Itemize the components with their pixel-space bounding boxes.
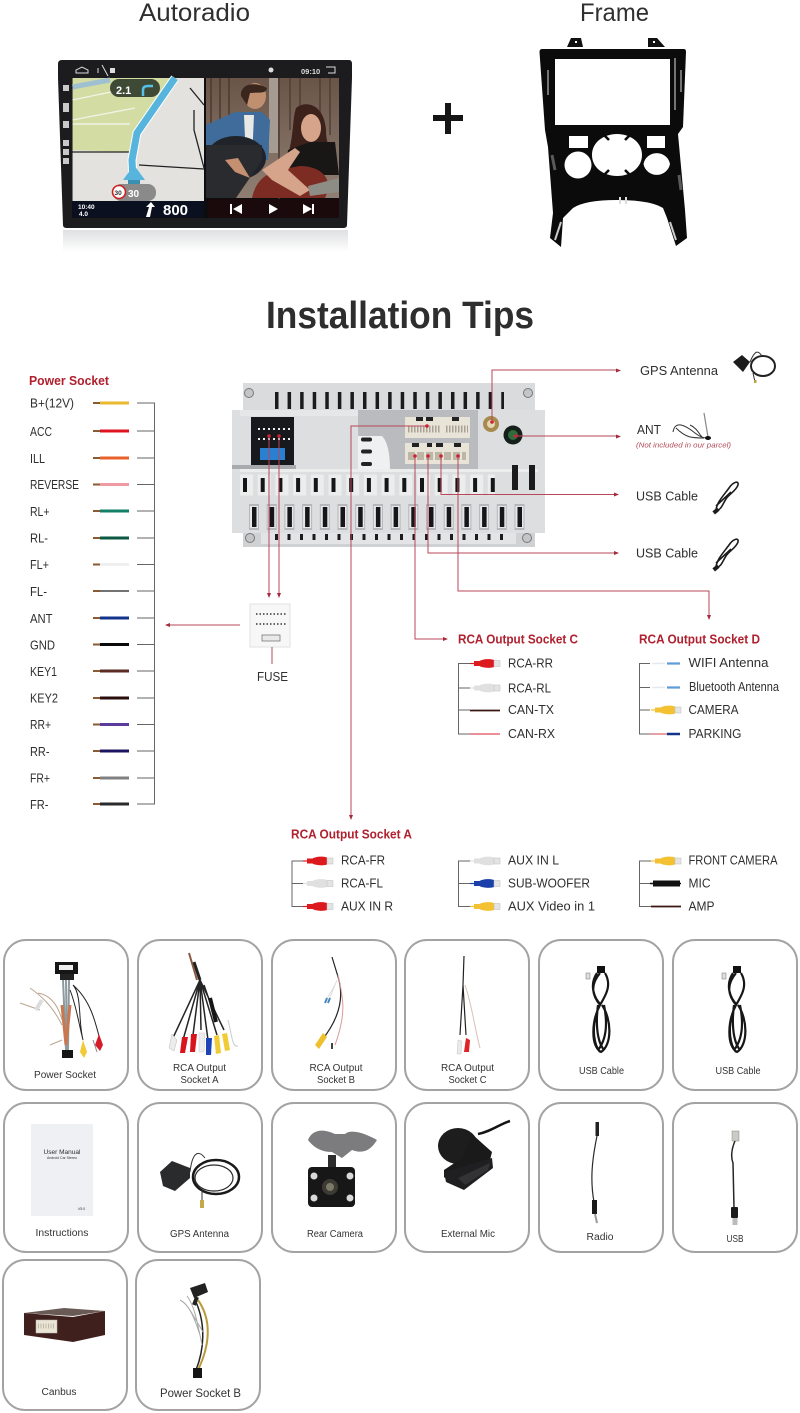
bracket right xyxy=(640,861,651,906)
wire: B+(12V): B+(12V) xyxy=(30,396,74,410)
row: FRONT CAMERA xyxy=(651,852,778,868)
manual booklet xyxy=(31,1124,93,1216)
wire: FL+ xyxy=(30,557,129,572)
USB ports xyxy=(358,436,390,470)
wire: GND: GND xyxy=(30,638,55,652)
row: MIC: MIC xyxy=(688,876,710,890)
card: Power Socket B xyxy=(136,1260,260,1410)
row: Bluetooth Antenna xyxy=(652,679,780,694)
row: PARKING xyxy=(650,726,742,741)
status bar xyxy=(76,65,335,76)
card: USB xyxy=(673,1103,797,1252)
wire: FL+: FL+ xyxy=(30,557,49,572)
wire: KEY2 xyxy=(30,690,129,706)
wire: FR+ xyxy=(30,770,129,786)
plus sign xyxy=(433,103,463,134)
bottom control bars: 10:40 xyxy=(78,204,95,211)
bracket xyxy=(640,664,650,734)
ANT connector xyxy=(504,426,522,444)
RCA Output Socket A xyxy=(291,828,778,914)
power socket wiring list xyxy=(29,374,154,812)
wire: ANT: ANT xyxy=(30,611,53,626)
wire: ILL: ILL xyxy=(30,451,45,466)
row: AUX IN L xyxy=(470,852,559,868)
row: AMP: AMP xyxy=(688,898,714,914)
wire: ACC: ACC xyxy=(30,424,52,439)
row: WIFI Antenna xyxy=(652,655,769,670)
row: AMP xyxy=(651,898,714,914)
row: AUX IN R: AUX IN R xyxy=(341,898,393,914)
bracket left xyxy=(292,861,303,906)
heading: RCA Output Socket C xyxy=(458,632,578,646)
card: Rear Camera xyxy=(272,1103,396,1252)
wire: FL-: FL- xyxy=(30,584,47,599)
wire: FR-: FR- xyxy=(30,797,48,812)
map area: 2.1 xyxy=(116,85,131,97)
card: Canbus xyxy=(3,1260,127,1410)
wire: KEY1: KEY1 xyxy=(30,664,57,679)
label: FUSE: FUSE xyxy=(257,669,288,684)
manual booklet: V5.0 xyxy=(78,1207,85,1211)
wire: GND xyxy=(30,638,129,652)
row: CAMERA xyxy=(651,702,739,717)
row: AUX Video in 1: AUX Video in 1 xyxy=(508,898,595,914)
label: Socket C xyxy=(448,1075,486,1086)
label: Power Socket xyxy=(34,1070,96,1081)
wire: KEY2: KEY2 xyxy=(30,690,58,706)
card: Power Socket xyxy=(4,940,128,1090)
row: CAN-TX: CAN-TX xyxy=(508,702,554,717)
label: RCA Output xyxy=(310,1063,363,1074)
label: USB Cable 2 with icon xyxy=(636,539,738,571)
row: CAMERA: CAMERA xyxy=(688,702,739,717)
label: ANT with icon and note: ANT xyxy=(637,422,661,437)
wire: ANT xyxy=(30,611,129,626)
row: PARKING: PARKING xyxy=(688,726,742,741)
bracket middle xyxy=(458,861,470,906)
label: Instructions xyxy=(36,1228,88,1239)
label xyxy=(173,1063,226,1086)
wire: FR- xyxy=(30,797,129,812)
row: SUB-WOOFER: SUB-WOOFER xyxy=(508,876,590,890)
label: USB Cable 2 with icon: USB Cable xyxy=(636,546,698,560)
wire: RR+ xyxy=(30,717,129,732)
map area: 30 xyxy=(128,189,140,200)
GPS connector xyxy=(483,416,499,432)
wire: RL-: RL- xyxy=(30,530,48,546)
label: External Mic xyxy=(441,1229,495,1240)
row: RCA-FL: RCA-FL xyxy=(341,876,383,890)
wire: FL- xyxy=(30,584,129,599)
bracket xyxy=(137,403,154,804)
fuse box xyxy=(250,604,290,664)
card: Radio xyxy=(539,1103,663,1252)
label: Canbus xyxy=(42,1387,76,1398)
card: USB Cable 1 xyxy=(539,940,663,1090)
map area: 30 xyxy=(114,190,122,197)
label: USB Cable xyxy=(579,1066,624,1077)
status bar: 09:10 xyxy=(301,67,320,76)
wire: REVERSE: REVERSE xyxy=(30,477,79,492)
wire: RR-: RR- xyxy=(30,744,50,759)
label: ANT with icon and note xyxy=(636,413,732,450)
card: RCA Output Socket A xyxy=(138,940,262,1090)
label: GPS Antenna with icon: GPS Antenna xyxy=(640,363,719,378)
manual booklet: User Manual xyxy=(44,1149,81,1156)
card: Instructions xyxy=(4,1103,128,1252)
wire: RR+: RR+ xyxy=(30,717,51,732)
wire: B+(12V) xyxy=(30,396,129,410)
row: RCA-FR xyxy=(303,852,385,868)
row: FRONT CAMERA: FRONT CAMERA xyxy=(688,852,778,868)
wire: RL+: RL+ xyxy=(30,504,50,519)
label: USB Cable 1 with icon: USB Cable xyxy=(636,488,698,504)
chassis rear view xyxy=(232,383,545,547)
row: AUX IN L: AUX IN L xyxy=(508,852,559,868)
upper socket block xyxy=(405,417,470,438)
video area xyxy=(206,78,339,200)
row: WIFI Antenna: WIFI Antenna xyxy=(688,655,769,670)
lower socket block xyxy=(405,443,469,464)
row: RCA-RR: RCA-RR xyxy=(508,656,553,670)
wire: REVERSE xyxy=(30,477,129,492)
row: RCA-FL xyxy=(303,876,383,890)
label: Radio xyxy=(586,1232,614,1243)
row: AUX IN R xyxy=(303,898,393,914)
row: RCA-RL: RCA-RL xyxy=(508,680,551,696)
row: AUX Video in 1 xyxy=(470,898,595,914)
bottom control bars xyxy=(72,199,339,219)
row: MIC xyxy=(650,876,710,890)
car radio product image xyxy=(58,60,352,252)
label: GPS Antenna with icon xyxy=(640,352,775,383)
bottom control bars: 800 xyxy=(163,202,188,219)
wire: KEY1 xyxy=(30,664,129,679)
label: RCA Output xyxy=(441,1063,494,1074)
wire: FR+: FR+ xyxy=(30,770,50,786)
label: USB xyxy=(726,1234,744,1245)
row: RCA-FR: RCA-FR xyxy=(341,852,385,868)
wire: ACC xyxy=(30,424,129,439)
label: Power Socket B xyxy=(160,1386,241,1400)
wire: RR- xyxy=(30,744,129,759)
map area xyxy=(72,78,204,201)
label: ANT with icon and note: (Not included in our parcel) xyxy=(636,440,732,450)
bracket xyxy=(458,664,470,734)
label xyxy=(310,1063,363,1086)
card: USB Cable 2 xyxy=(673,940,797,1090)
wire: RL+ xyxy=(30,504,129,519)
side icons xyxy=(63,85,69,164)
row: CAN-RX: CAN-RX xyxy=(508,726,555,741)
label: USB Cable 1 with icon xyxy=(636,482,738,514)
label: Socket A xyxy=(180,1075,219,1086)
heading: RCA Output Socket A xyxy=(291,828,412,842)
red connection lines and arrows xyxy=(165,368,711,820)
label: RCA Output xyxy=(173,1063,226,1074)
card: GPS Antenna xyxy=(138,1103,262,1252)
RCA Output Socket C xyxy=(458,632,578,741)
row: Bluetooth Antenna: Bluetooth Antenna xyxy=(689,679,780,694)
heading: Installation Tips: Installation Tips xyxy=(266,295,534,337)
label xyxy=(441,1063,494,1086)
label: GPS Antenna xyxy=(170,1229,229,1240)
wire: ILL xyxy=(30,451,129,466)
RCA Output Socket D xyxy=(639,632,780,741)
manual booklet: Android Car Stereo xyxy=(47,1156,77,1160)
row: SUB-WOOFER xyxy=(470,876,590,890)
label: Socket B xyxy=(317,1075,355,1086)
bottom control bars: 4.0 xyxy=(79,211,88,218)
label: USB Cable xyxy=(716,1066,761,1077)
card: RCA Output Socket B xyxy=(272,940,396,1090)
screws xyxy=(244,388,532,542)
heading: RCA Output Socket D xyxy=(639,632,760,646)
car frame product image xyxy=(540,38,687,247)
label: Rear Camera xyxy=(307,1229,363,1240)
card: RCA Output Socket C xyxy=(405,940,529,1090)
heading: Power Socket: Power Socket xyxy=(29,374,110,388)
wire: RL- xyxy=(30,530,129,546)
card: External Mic xyxy=(405,1103,529,1252)
